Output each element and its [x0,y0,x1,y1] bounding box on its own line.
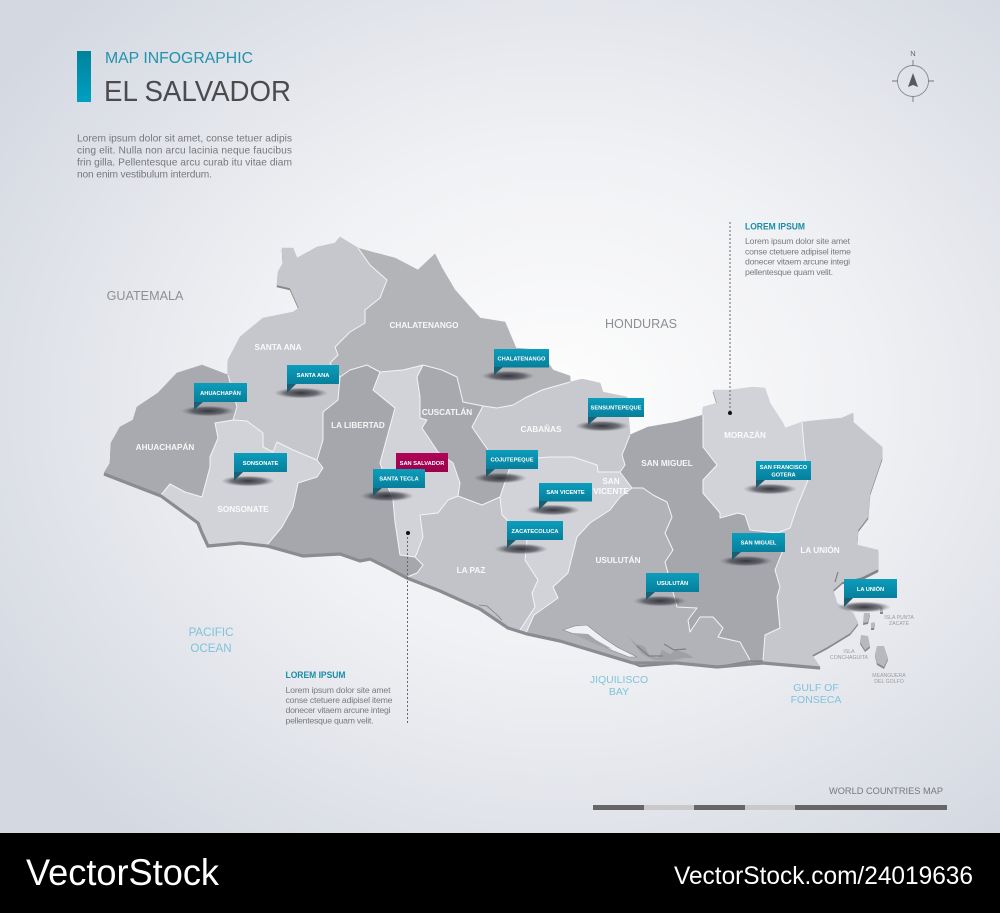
water labels: GULF OF [793,682,839,694]
map labels: LA PAZ [457,566,485,575]
pin: Sensuntepeque: SENSUNTEPEQUE [591,406,642,412]
map labels: VICENTE [593,487,629,496]
department: Chalatenango [330,248,570,408]
department: La Union [763,413,882,667]
pin: Zacatecoluca [494,521,563,554]
pin: San Salvador [396,453,448,472]
department: Ahuachapan [104,365,237,497]
pin: San Salvador: SAN SALVADOR [400,461,444,467]
pin: San Vicente: SAN VICENTE [546,490,585,496]
island labels: DEL GOLFO [874,679,904,685]
map of departments [104,237,888,667]
callout: south text: conse ctetuere adipisel iteme [286,695,393,705]
callout: north text: Lorem ipsum dolor site amet [745,236,851,246]
islands [860,607,888,667]
callout: north text: LOREM IPSUM [745,222,805,232]
island labels: ZACATE [889,621,910,627]
title: EL SALVADOR [104,76,291,108]
callout: south text: LOREM IPSUM [286,670,346,680]
map labels: CABAÑAS [521,424,562,434]
pin: Ahuachapan: AHUACHAPÁN [200,390,241,397]
intro text [77,134,292,180]
map labels: CUSCATLÁN [422,407,472,417]
country labels: GUATEMALA [107,289,184,303]
intro text: frin gilla. Pellentesque arcu curab itu vitae diam [77,158,292,168]
pin: Zacatecoluca: ZACATECOLUCA [512,529,558,535]
map labels: SAN [602,477,620,486]
department: Usulutan [526,488,750,666]
department: La Libertad [267,365,423,577]
intro text: non enim vestibulum interdum. [77,170,212,180]
pin: Chalatenango: CHALATENANGO [498,356,546,362]
water labels: FONSECA [791,694,841,706]
pin: San Francisco Gotera: GOTERA [771,472,796,478]
department: La Paz [407,496,538,630]
map labels: SONSONATE [217,505,269,514]
pin: San Francisco Gotera [743,461,811,494]
pin: Santa Tecla: SANTA TECLA [379,476,419,482]
pin: Usulutan: USULUTÁN [657,580,688,587]
department: Cabanas [472,379,630,472]
department borders [161,248,808,660]
pin: Sensuntepeque [575,398,644,432]
map labels: USULUTÁN [595,555,641,565]
pin: San Francisco Gotera: SAN FRANCISCO [760,465,808,471]
callout: south text: pellentesque quam velit. [286,716,374,726]
icon: compass [892,49,934,102]
pin: Sonsonate [221,453,287,486]
intro text: cing elit. Nulla non arcu lacinia neque faucibus [77,146,292,156]
pin: Ahuachapan [181,383,247,416]
map labels [136,321,840,575]
intro text: Lorem ipsum dolor sit amet, conse tetuer adipis [77,134,292,144]
water labels: PACIFIC [189,626,233,639]
country labels [107,289,677,331]
country labels: HONDURAS [605,317,677,331]
callout: north text: conse ctetuere adipisel iteme [745,246,851,256]
callout: north text: pellentesque quam velit. [745,267,833,277]
callout: north text [745,222,851,277]
pin: La Union [837,579,897,612]
scale caption: WORLD COUNTRIES MAP [829,786,943,797]
map labels: AHUACHAPÁN [136,442,194,452]
island labels: ISLA PUNTA [884,615,914,621]
pin: Cojutepeque [473,450,538,484]
island labels [830,615,914,685]
water labels [189,626,841,706]
pin: Usulutan [633,573,699,606]
island labels: ISLA [843,649,855,655]
callout: south text [286,670,393,726]
pin: Chalatenango [481,349,549,382]
pin: San Miguel [719,533,785,566]
department: Sonsonate [161,420,323,545]
map labels: LA LIBERTAD [331,421,385,430]
leader line: north callout [728,222,732,415]
water labels: JIQUILISCO [590,674,648,686]
department: San Miguel [620,415,783,660]
map labels: MORAZÁN [724,430,766,440]
map labels: SANTA ANA [254,343,302,352]
water labels: BAY [609,686,629,698]
department: San Salvador [373,365,460,557]
department: Cuscatlan [417,365,510,505]
island labels: MEANGUERA [872,673,906,679]
pin: San Vicente [526,483,592,516]
callout: north text: donecer vitaem arcune integi [745,256,850,266]
pin: Sonsonate: SONSONATE [243,461,279,467]
scale bar [593,805,947,810]
pin: Santa Ana [274,365,339,398]
pin: La Union: LA UNIÓN [857,585,884,593]
department: San Vicente [500,457,632,633]
callout: south text: donecer vitaem arcune integi [286,705,391,715]
icon: compass: N [910,49,916,58]
pin: San Miguel: SAN MIGUEL [741,540,777,546]
map labels: SAN MIGUEL [641,459,693,468]
map labels: CHALATENANGO [390,321,459,330]
title kicker: MAP INFOGRAPHIC [105,50,253,67]
footer band: VectorStock [26,852,219,893]
title accent bar [77,51,91,102]
pin: Santa Tecla [360,469,425,502]
pin: Santa Ana: SANTA ANA [297,373,329,379]
department: Morazan [703,387,808,533]
island labels: CONCHAGUITA [830,655,869,661]
coast edge [104,474,820,668]
bay inlets [479,570,878,661]
map labels: LA UNIÓN [800,544,840,555]
leader line: south callout [406,531,410,725]
water labels: OCEAN [190,642,232,655]
department: Santa Ana [228,237,387,460]
footer band [0,833,1000,913]
callout: south text: Lorem ipsum dolor site amet [286,685,391,695]
footer band: VectorStock.com/24019636 [674,862,973,890]
pin: Cojutepeque: COJUTEPEQUE [491,458,534,464]
